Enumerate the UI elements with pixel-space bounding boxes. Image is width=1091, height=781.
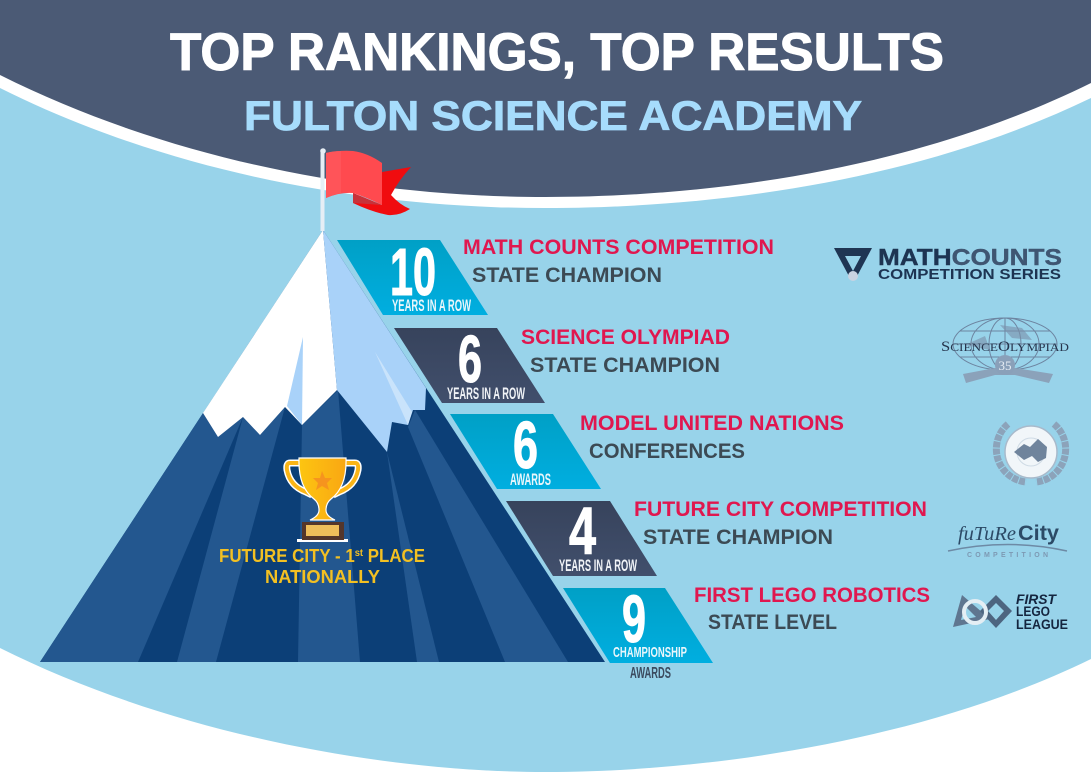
logo: United Nations emblem: [996, 424, 1066, 482]
banner: 10 years in a row: YEARS IN A ROW: [392, 297, 471, 315]
logo: Mathcounts: MATH COUNTS: [878, 244, 1062, 270]
logo: First Lego League: LEAGUE: [1016, 616, 1068, 632]
text: Science Olympiad: [521, 326, 730, 377]
logo: Future City: City: [1018, 522, 1059, 545]
text: First Lego: STATE LEVEL: [708, 611, 837, 634]
banner: 9 championship awards: AWARDS: [630, 665, 671, 682]
banner: 6 awards: 6: [513, 408, 538, 483]
text: First Lego: [694, 584, 930, 634]
text: First Lego: FIRST LEGO ROBOTICS: [694, 584, 930, 607]
banner: 10 years in a row: 10: [390, 235, 436, 310]
text: Math Counts: STATE CHAMPION: [472, 264, 662, 287]
text: Model United Nations: [580, 412, 844, 463]
text: Math Counts: MATH COUNTS COMPETITION: [463, 236, 774, 259]
banner: 6 years in a row: 6: [458, 322, 482, 397]
header white band: [0, 0, 1091, 208]
text: Model United Nations: CONFERENCES: [589, 440, 745, 463]
text: Science Olympiad: SCIENCE OLYMPIAD: [521, 326, 730, 349]
caption: Future City 1st place: st: [355, 548, 364, 559]
logo: Future City: [948, 522, 1067, 559]
banner: 6 years in a row: YEARS IN A ROW: [447, 385, 525, 403]
logo: Mathcounts: [834, 244, 1062, 283]
logo: Science Olympiad: 35: [998, 358, 1012, 373]
banner: 4 years in a row: [506, 494, 657, 576]
text: Model United Nations: MODEL UNITED NATIONS: [580, 412, 844, 435]
banner: 9 championship awards: [563, 582, 713, 682]
logo: Mathcounts: COMPETITION SERIES: [878, 266, 1061, 283]
title: TOP RANKINGS, TOP RESULTS: [170, 23, 944, 82]
caption: Future City 1st place: FUTURE CITY - 1: [219, 546, 364, 566]
banner: 6 awards: AWARDS: [510, 471, 551, 489]
caption: Future City 1st place: PLACE: [363, 546, 425, 566]
banner: 9 championship awards: 9: [622, 582, 646, 657]
banner: 6 awards: [450, 408, 601, 489]
logo: Science Olympiad: SCIENCE OLYMPIAD: [941, 339, 1069, 355]
logo: Science Olympiad: [941, 318, 1069, 383]
logo: Future City: fuTuRe: [958, 523, 1016, 545]
mountain illustration: [40, 230, 605, 662]
banner: 10 years in a row: [337, 235, 488, 315]
icon: gold trophy: [287, 458, 358, 542]
logo: First Lego League: LEGO: [1016, 603, 1050, 619]
icon: flag on summit: [320, 148, 411, 231]
caption: Future City 1st place: [219, 546, 425, 587]
text: Future City: STATE CHAMPION: [643, 526, 833, 549]
banner: 4 years in a row: 4: [569, 494, 596, 569]
logo: Future City: COMPETITION: [967, 552, 1048, 559]
subtitle: FULTON SCIENCE ACADEMY: [244, 92, 862, 139]
caption: Future City 1st place: NATIONALLY: [265, 567, 380, 587]
header dark panel: [0, 0, 1091, 197]
banner: 9 championship awards: CHAMPIONSHIP: [613, 644, 687, 661]
text: Science Olympiad: STATE CHAMPION: [530, 354, 720, 377]
logo: First Lego League: [953, 591, 1068, 632]
text: Future City: FUTURE CITY COMPETITION: [634, 498, 927, 521]
text: Future City: [634, 498, 927, 549]
logo: First Lego League: FIRST: [1016, 591, 1057, 607]
text: Math Counts: [463, 236, 774, 287]
banner: 4 years in a row: YEARS IN A ROW: [559, 557, 637, 575]
banner: 6 years in a row: [394, 322, 545, 403]
